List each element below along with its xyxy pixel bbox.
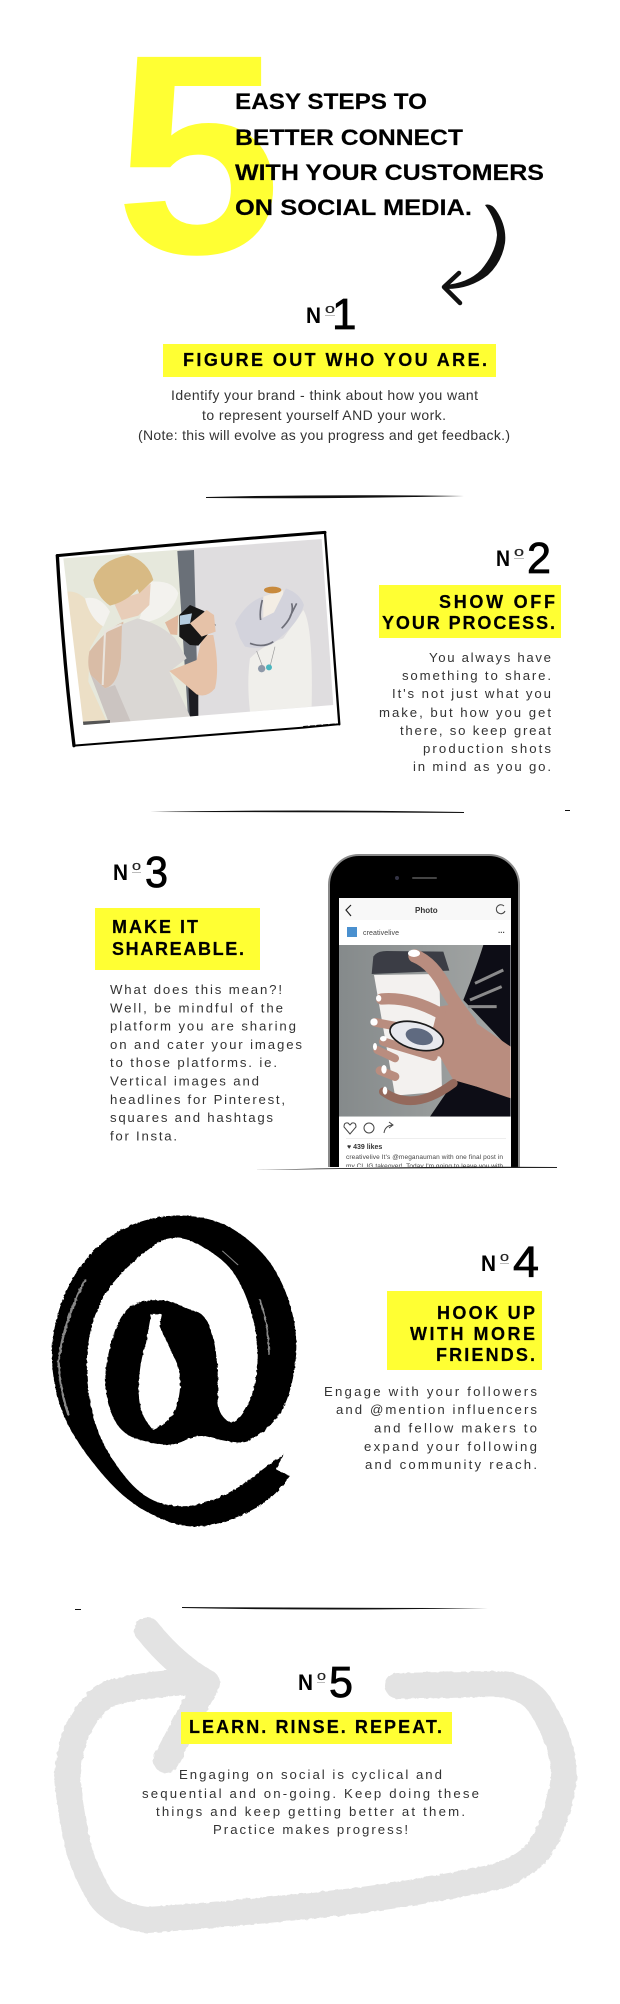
phone mockup xyxy=(329,855,519,1195)
phone mockup: Photo xyxy=(415,906,438,915)
step 5 xyxy=(67,1630,564,1920)
step 1 text: to represent yourself AND your work. xyxy=(202,407,446,423)
step 1 text xyxy=(138,387,510,443)
step 1 heading xyxy=(163,344,496,377)
title text xyxy=(235,89,544,220)
step 1 number: 1 xyxy=(332,290,356,339)
title text: ON SOCIAL MEDIA. xyxy=(235,195,472,220)
step 3 heading: SHAREABLE. xyxy=(112,939,244,959)
title text: EASY STEPS TO xyxy=(235,89,427,114)
step 2 heading: SHOW OFF xyxy=(439,592,555,612)
step 3 text: headlines for Pinterest, xyxy=(110,1092,285,1107)
step 2 text: It's not just what you xyxy=(392,686,551,701)
step 2 text: production shots xyxy=(423,741,551,756)
step 5 text: Practice makes progress! xyxy=(213,1822,408,1837)
step 4 text: Engage with your followers xyxy=(324,1384,537,1399)
big yellow numeral 5: 5 xyxy=(115,0,281,313)
step 2 heading xyxy=(379,585,561,638)
step 4 text: and fellow makers to xyxy=(374,1420,537,1436)
step 4 number: N xyxy=(481,1251,496,1276)
step 3 number: o xyxy=(132,859,141,873)
step 3 text: What does this mean?! xyxy=(110,982,282,997)
title block xyxy=(115,0,544,313)
step 3 text: to those platforms. ie. xyxy=(110,1055,277,1070)
step 2 text xyxy=(379,650,551,774)
step 2 text: You always have xyxy=(429,650,551,665)
step 2 heading: YOUR PROCESS. xyxy=(382,613,555,633)
step 2 xyxy=(50,525,561,774)
phone mockup: my CL IG takeover!. Today I'm going to leave you with xyxy=(346,1163,503,1170)
step 2 text: in mind as you go. xyxy=(413,759,551,774)
step 3 heading xyxy=(95,908,260,970)
phone mockup: creativelive It's @meganauman with one final post in xyxy=(346,1154,503,1161)
step 3 text: on and cater your images xyxy=(110,1037,302,1052)
step 3 text: squares and hashtags xyxy=(110,1110,273,1125)
instagram photo: hand holding cup xyxy=(339,945,511,1117)
step 2 number xyxy=(496,534,551,583)
arrow: brush arrow pointing to step 1 xyxy=(444,205,505,303)
step 4 heading: HOOK UP xyxy=(437,1303,535,1323)
step 3 text xyxy=(110,982,302,1143)
step 5 number: o xyxy=(317,1669,326,1683)
step 4 number xyxy=(481,1238,539,1287)
step 4 heading: FRIENDS. xyxy=(436,1345,535,1365)
step 2 text: there, so keep great xyxy=(400,723,551,738)
step 4 text xyxy=(324,1384,537,1472)
infographic canvas xyxy=(51,56,578,1934)
phone mockup: ... xyxy=(498,926,505,935)
step 5 text xyxy=(142,1767,479,1837)
step 5 number xyxy=(298,1658,353,1707)
step 3 text: for Insta. xyxy=(110,1128,177,1143)
title text: BETTER CONNECT xyxy=(235,125,464,150)
step 4 heading xyxy=(387,1291,542,1370)
step 3 text: Well, be mindful of the xyxy=(110,1000,283,1015)
step 2 text: something to share. xyxy=(402,668,551,683)
step 3 number xyxy=(113,848,168,897)
step 1 text: (Note: this will evolve as you progress and get feedback.) xyxy=(138,427,510,443)
step 3 text: platform you are sharing xyxy=(110,1019,296,1034)
arrow: grey cycle loop xyxy=(67,1630,564,1920)
step 2 number: 2 xyxy=(527,534,551,583)
step 4 number: 4 xyxy=(513,1238,539,1287)
icon: brush-drawn at sign xyxy=(52,1215,296,1527)
photo: maker photographing scarf on mannequin xyxy=(56,530,340,748)
step 5 text: Engaging on social is cyclical and xyxy=(179,1767,442,1782)
step 2 text: make, but how you get xyxy=(379,705,551,720)
step 5 text: sequential and on-going. Keep doing these xyxy=(142,1786,479,1801)
step 4 text: and @mention influencers xyxy=(336,1402,537,1417)
step 5 number: N xyxy=(298,1670,313,1695)
title text: WITH YOUR CUSTOMERS xyxy=(235,160,544,185)
step 5 heading xyxy=(181,1712,452,1744)
step 4 text: and community reach. xyxy=(365,1457,537,1472)
step 1 number: o xyxy=(325,302,335,316)
step 1 xyxy=(138,290,510,443)
step 3 text: Vertical images and xyxy=(110,1074,259,1088)
step 2 number: o xyxy=(514,545,524,559)
step 1 number xyxy=(306,290,356,339)
phone mockup: creativelive xyxy=(363,930,399,937)
step 5 number: 5 xyxy=(329,1658,353,1707)
step 3 number: N xyxy=(113,860,128,885)
step 2 number: N xyxy=(496,546,510,571)
step 1 heading: FIGURE OUT WHO YOU ARE. xyxy=(183,350,487,370)
step 4 text: expand your following xyxy=(364,1439,537,1454)
step 5 text: things and keep getting better at them. xyxy=(156,1804,465,1819)
instagram action icons xyxy=(344,1122,393,1134)
step 1 text: Identify your brand - think about how you want xyxy=(171,387,478,403)
step 4 heading: WITH MORE xyxy=(410,1324,535,1344)
step 5 heading: LEARN. RINSE. REPEAT. xyxy=(189,1717,442,1737)
step 1 number: N xyxy=(306,303,321,328)
phone mockup: ♥ 439 likes xyxy=(347,1144,382,1151)
step 4 number: o xyxy=(500,1250,509,1264)
step 3 xyxy=(95,848,519,1195)
step 3 heading: MAKE IT xyxy=(112,917,198,937)
step 3 number: 3 xyxy=(145,848,168,897)
step 4 xyxy=(52,1215,542,1527)
